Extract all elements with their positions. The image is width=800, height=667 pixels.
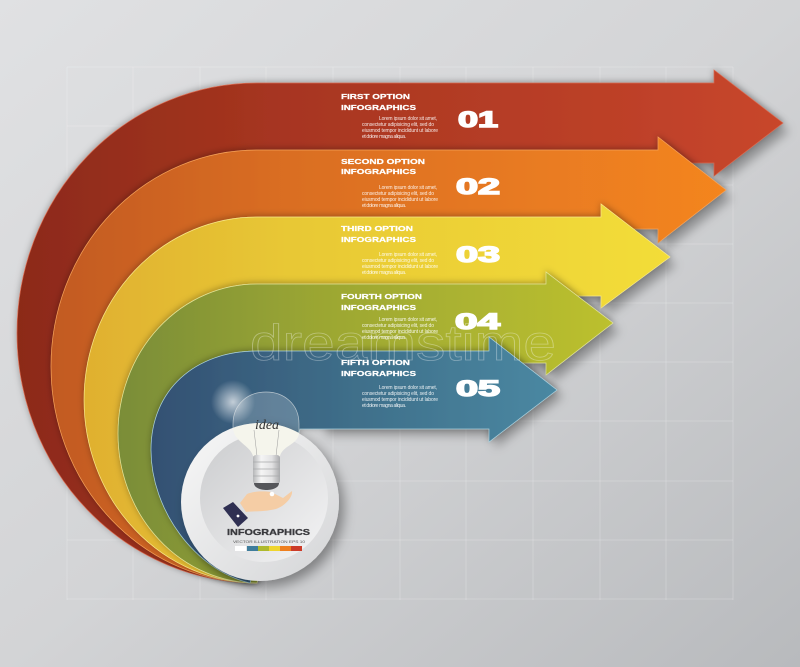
option 5 text <box>341 358 438 409</box>
option 2 text: SECOND OPTION <box>341 157 425 166</box>
badge title: INFOGRAPHICS <box>227 527 310 537</box>
number 01: 01 <box>458 107 498 132</box>
option 4 text: et dolore magna aliqua. <box>362 335 406 341</box>
grid lines <box>67 67 733 600</box>
option 4 text: eiusmod tempor incididunt ut labore <box>362 329 438 335</box>
idea label: idea <box>255 418 279 433</box>
colour bar <box>235 546 302 551</box>
option 4 text <box>341 292 438 341</box>
badge subtitle: VECTOR ILLUSTRATION EPS 10 <box>233 540 305 544</box>
option 3 text: INFOGRAPHICS <box>341 235 416 244</box>
option 3 text: THIRD OPTION <box>341 224 413 233</box>
option 4 text: FOURTH OPTION <box>341 292 422 301</box>
arrow 3: yellow <box>84 204 676 583</box>
option 5 text: et dolore magna aliqua. <box>362 403 406 409</box>
arrow 4: green <box>118 272 619 583</box>
icon: hand <box>223 491 292 527</box>
option 5 text: eiusmod tempor incididunt ut labore <box>362 397 438 403</box>
option 5 text: consectetur adipisicing elit, sed do <box>362 391 434 397</box>
option 1 text <box>341 92 438 140</box>
option 2 text <box>341 157 438 209</box>
option 1 text: FIRST OPTION <box>341 92 410 101</box>
option 3 text: consectetur adipisicing elit, sed do <box>362 258 434 264</box>
light glow <box>211 380 255 424</box>
option 3 text <box>341 224 438 276</box>
arrow 1: red <box>17 70 789 583</box>
number 05: 05 <box>456 376 500 401</box>
arrow 5: blue <box>151 337 563 583</box>
badge circle <box>181 423 339 581</box>
number 03: 03 <box>456 242 500 267</box>
option 2 text: et dolore magna aliqua. <box>362 203 406 209</box>
number 02: 02 <box>456 174 500 199</box>
option 3 text: eiusmod tempor incididunt ut labore <box>362 264 438 270</box>
option 1 text: Lorem ipsum dolor sit amet, <box>379 116 437 122</box>
option 3 text: et dolore magna aliqua. <box>362 270 406 276</box>
option 1 text: eiusmod tempor incididunt ut labore <box>362 128 438 134</box>
option 1 text: INFOGRAPHICS <box>341 103 416 112</box>
option 2 text: INFOGRAPHICS <box>341 167 416 176</box>
option 2 text: eiusmod tempor incididunt ut labore <box>362 197 438 203</box>
option 2 text: Lorem ipsum dolor sit amet, <box>379 185 437 191</box>
option 2 text: consectetur adipisicing elit, sed do <box>362 191 434 197</box>
number 04: 04 <box>455 309 501 334</box>
arrow 2: orange <box>51 137 732 583</box>
option 4 text: INFOGRAPHICS <box>341 303 416 312</box>
option 4 text: Lorem ipsum dolor sit amet, <box>379 317 437 323</box>
watermark: dreamstime <box>250 315 556 371</box>
option 5 text: INFOGRAPHICS <box>341 369 416 378</box>
bulb glass top <box>233 392 299 434</box>
option 5 text: Lorem ipsum dolor sit amet, <box>379 385 437 391</box>
option 1 text: consectetur adipisicing elit, sed do <box>362 122 434 128</box>
option 3 text: Lorem ipsum dolor sit amet, <box>379 252 437 258</box>
option 4 text: consectetur adipisicing elit, sed do <box>362 323 434 329</box>
icon: light bulb <box>233 418 299 490</box>
option 5 text: FIFTH OPTION <box>341 358 410 367</box>
option 1 text: et dolore magna aliqua. <box>362 134 406 140</box>
